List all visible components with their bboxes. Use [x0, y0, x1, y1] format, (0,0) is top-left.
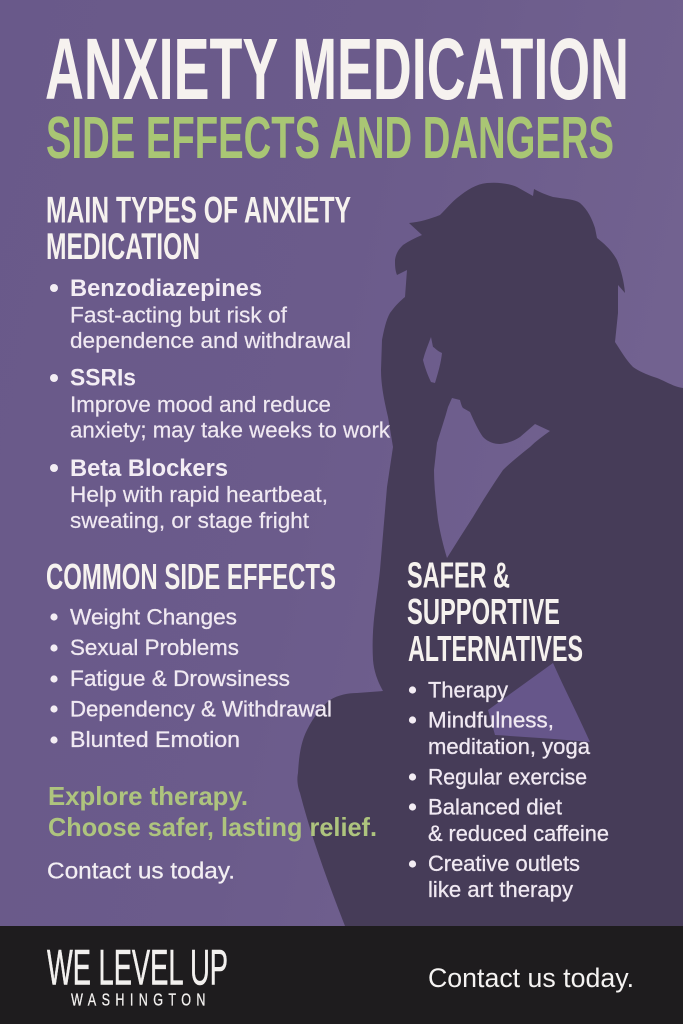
item: SSRIs: Improve mood and reduce	[70, 392, 331, 417]
item: benzodiazepines	[50, 275, 351, 353]
heading: alternatives: SAFER &	[407, 554, 510, 596]
title	[45, 21, 629, 171]
list: alternatives: Creative outlets	[428, 851, 580, 876]
panel: main types of anxiety medication	[46, 190, 391, 533]
heading: main types: MAIN TYPES OF ANXIETY	[46, 190, 351, 230]
item: beta blockers: Help with rapid heartbeat,	[70, 482, 328, 507]
item: benzodiazepines: Fast-acting but risk of	[70, 302, 288, 328]
list: alternatives: Balanced diet	[428, 794, 562, 820]
panel: safer and supportive alternatives	[407, 554, 609, 902]
list: alternatives	[409, 678, 609, 902]
item: benzodiazepines: Benzodiazepines	[70, 275, 262, 302]
list: side effects: Dependency & Withdrawal	[70, 696, 332, 722]
logo: we level up washington: WASHINGTON	[71, 990, 211, 1010]
item: beta blockers	[50, 455, 328, 533]
list: alternatives: Mindfulness,	[428, 708, 554, 732]
item: SSRIs: SSRIs	[70, 364, 136, 392]
callout: explore therapy	[48, 781, 377, 842]
list: alternatives: & reduced caffeine	[428, 821, 609, 846]
list: side effects: Blunted Emotion	[70, 727, 240, 752]
item: benzodiazepines: dependence and withdrawal	[70, 328, 351, 353]
footer bar	[0, 926, 683, 1024]
logo: we level up washington	[47, 940, 228, 1010]
list: side effects: Weight Changes	[70, 604, 237, 630]
list: side effects: Sexual Problems	[70, 635, 239, 660]
list: alternatives: like art therapy	[428, 877, 573, 902]
logo: we level up washington: WE LEVEL UP	[47, 940, 228, 996]
list: alternatives: Therapy	[428, 678, 508, 702]
item: SSRIs	[50, 364, 391, 442]
silhouette: gap between arm and knee	[488, 663, 590, 742]
heading: alternatives	[407, 554, 583, 669]
item: SSRIs: anxiety; may take weeks to work	[70, 418, 391, 442]
panel: common side effects	[46, 556, 336, 752]
list: alternatives: meditation, yoga	[428, 734, 591, 759]
contact line: Contact us today.	[47, 858, 235, 884]
item: beta blockers: Beta Blockers	[70, 455, 228, 482]
list: side effects: Fatigue & Drowsiness	[70, 666, 290, 691]
footer contact: Contact us today.	[428, 963, 634, 993]
callout: explore therapy: Explore therapy.	[48, 781, 248, 811]
silhouette: person holding head	[297, 183, 683, 926]
callout: explore therapy: Choose safer, lasting relief.	[48, 812, 377, 842]
panel: main types of anxiety medication: MEDICATION	[46, 226, 200, 267]
heading: alternatives: ALTERNATIVES	[408, 628, 583, 669]
heading: common side effects: COMMON SIDE EFFECTS	[46, 556, 336, 597]
list: side effects	[50, 604, 332, 752]
item: beta blockers: sweating, or stage fright	[70, 508, 309, 533]
list: alternatives: Regular exercise	[428, 764, 587, 790]
heading: alternatives: SUPPORTIVE	[407, 591, 560, 632]
